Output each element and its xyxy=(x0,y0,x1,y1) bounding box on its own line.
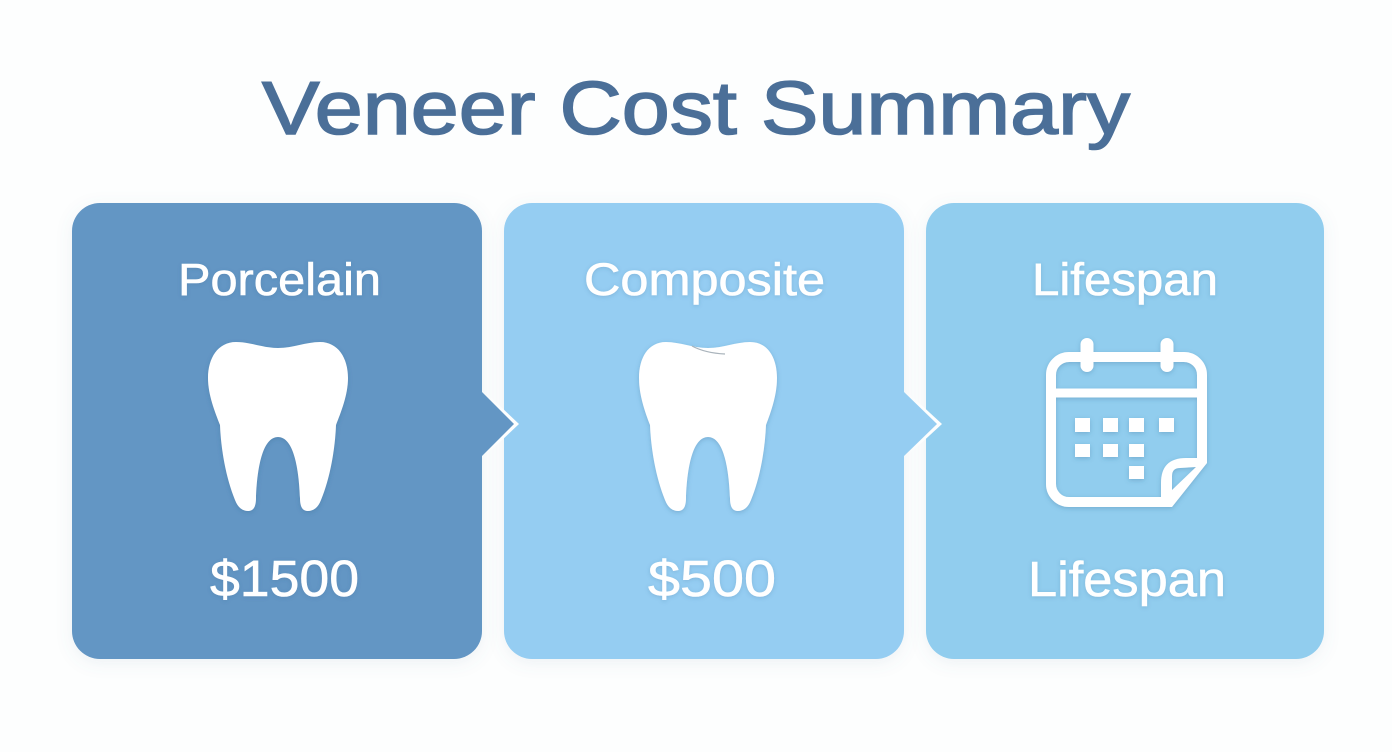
panel: composite xyxy=(504,203,942,659)
arrow: porcelain to composite xyxy=(478,389,519,459)
composite arrow tip xyxy=(900,392,937,456)
porcelain card background xyxy=(72,203,482,659)
composite heading: Composite xyxy=(584,254,825,305)
icon: tooth xyxy=(208,342,348,511)
porcelain price: $1500 xyxy=(210,550,359,607)
lifespan card background xyxy=(926,203,1324,659)
panel: porcelain xyxy=(72,203,519,659)
icon: tooth xyxy=(639,342,777,511)
composite card background xyxy=(504,203,904,659)
porcelain arrow tip xyxy=(478,392,514,456)
lifespan value: Lifespan xyxy=(1028,553,1226,607)
lifespan heading: Lifespan xyxy=(1032,254,1218,305)
arrow: composite to lifespan xyxy=(900,389,942,459)
composite price: $500 xyxy=(648,550,776,607)
porcelain heading: Porcelain xyxy=(178,254,381,305)
panel: lifespan xyxy=(926,203,1324,659)
icon: calendar xyxy=(1051,338,1207,507)
title: Veneer Cost Summary xyxy=(262,66,1131,150)
